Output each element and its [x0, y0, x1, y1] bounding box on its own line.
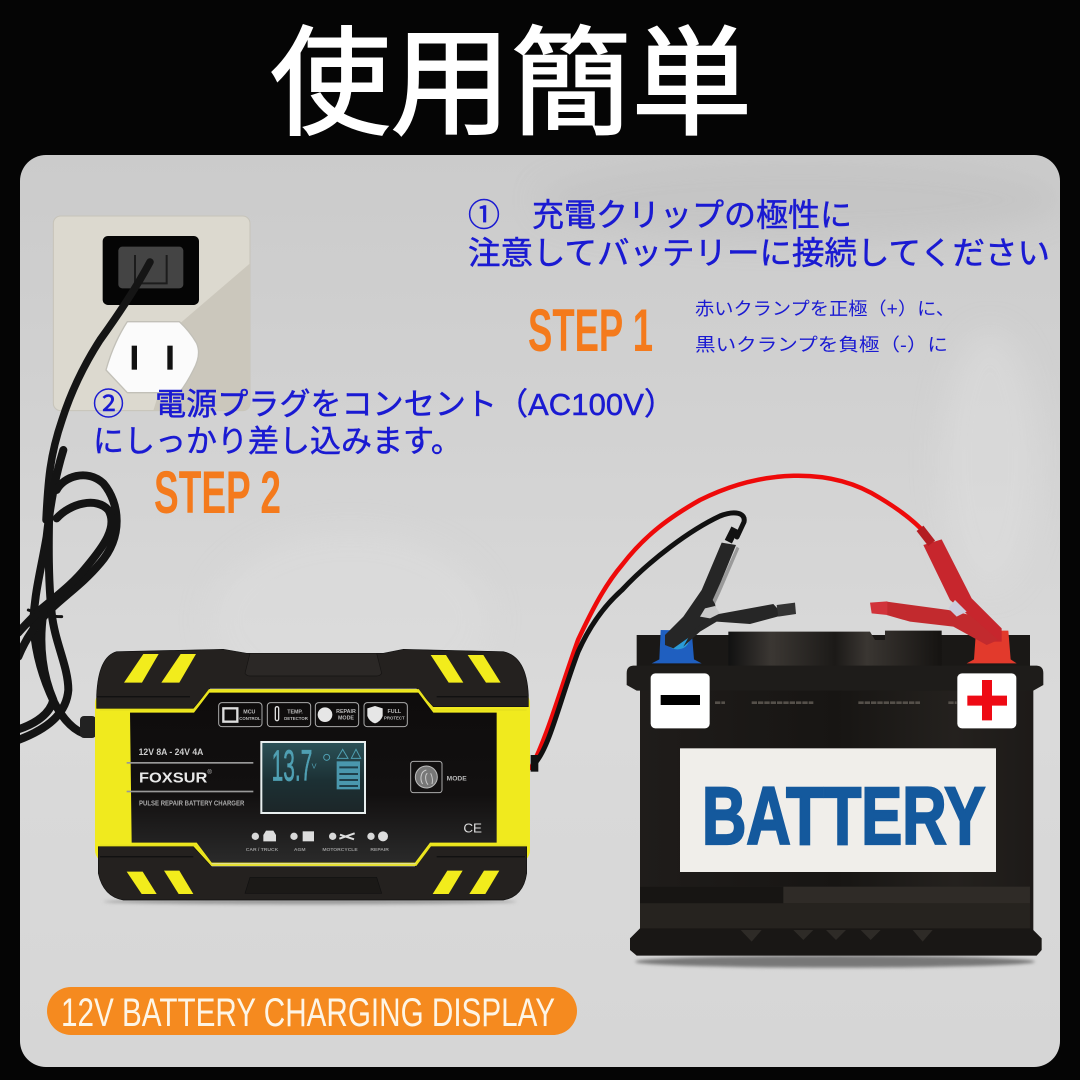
step 2 instruction — [93, 387, 675, 459]
charger: badge labels: FULL — [388, 709, 402, 715]
charger: mode button — [411, 761, 467, 793]
battery: label: BATTERY — [702, 771, 985, 862]
step 2 instruction: にしっかり差し込みます。 — [93, 424, 462, 459]
charger: rating and brand: ® — [207, 769, 212, 776]
charger: LCD display — [261, 742, 365, 813]
title: 使用簡単 — [270, 19, 752, 151]
step 2 instruction: ② 電源プラグをコンセント（AC100V） — [93, 387, 675, 422]
charger: trim lines — [97, 653, 527, 893]
step 1 clamp note: 黒いクランプを負極（-）に — [695, 335, 948, 355]
battery: body — [640, 687, 1033, 933]
charger: LCD display: 13.7 — [272, 742, 312, 791]
battery: shadow — [635, 956, 1035, 968]
battery: label — [680, 748, 996, 872]
charger: yellow vents — [124, 654, 501, 894]
charger: rating and brand — [127, 747, 253, 807]
battery — [627, 528, 1043, 968]
charger: mode indicators: AGM — [294, 847, 305, 853]
battery: positive terminal — [967, 631, 1017, 663]
step 1 instruction — [468, 197, 1050, 271]
step 1 instruction: ① 充電クリップの極性に — [468, 197, 852, 233]
step 1 label: STEP 1 — [528, 297, 653, 364]
charger: cable strain relief — [531, 755, 538, 772]
charger: rating and brand: PULSE REPAIR BATTERY CHARGER — [139, 798, 245, 807]
clamp: red — [870, 528, 1002, 645]
battery: bottom flange — [630, 928, 1042, 956]
charger: front panel — [130, 693, 497, 863]
charger — [95, 649, 538, 904]
charger: badge labels: TEMP. — [287, 709, 303, 715]
charger: mode button: MODE — [447, 776, 467, 782]
charger: badge labels: MCU — [243, 709, 256, 715]
icon: power cord — [18, 262, 150, 740]
charger: LCD display: V — [312, 761, 317, 770]
charger: top black housing — [97, 649, 528, 708]
icon: wall outlet with plug — [53, 216, 250, 411]
charger: rating and brand: 12V 8A - 24V 4A — [139, 747, 204, 757]
charger: feature badges — [219, 703, 407, 727]
charger: mode indicators: MOTORCYCLE — [322, 847, 358, 853]
charger: rating and brand: FOXSUR — [139, 771, 208, 787]
battery: plus sign — [957, 673, 1016, 728]
step 1 instruction: 注意してバッテリーに接続してください — [468, 235, 1050, 271]
charger: mode indicators: REPAIR — [370, 847, 389, 853]
battery: minus sign — [651, 673, 710, 728]
step 2 label: STEP 2 — [154, 459, 281, 526]
charger: mode indicators: CAR / TRUCK — [246, 847, 279, 853]
wire: black negative lead — [536, 513, 744, 762]
charger: badge labels: MODE — [338, 716, 354, 722]
wire: red positive lead — [531, 476, 925, 768]
callout: display caption: 12V BATTERY CHARGING DISPLAY — [61, 991, 555, 1035]
charger: badge labels — [239, 709, 405, 722]
step 1 clamp note: 赤いクランプを正極（+）に、 — [695, 299, 955, 319]
battery: negative terminal — [652, 630, 702, 663]
clamp: black — [665, 528, 796, 648]
charger: bottom black housing — [98, 847, 527, 900]
step 1 clamp note — [695, 299, 955, 355]
battery: lid — [627, 666, 1043, 691]
charger: badge labels: DETECTOR — [284, 716, 309, 721]
charger: mode indicators — [246, 831, 389, 853]
charger: yellow body — [95, 690, 530, 863]
charger: badge labels: PROTECT — [384, 716, 405, 721]
charger: shadow — [103, 899, 517, 904]
charger: badge labels: CONTROL — [239, 716, 261, 721]
charger: badge labels: REPAIR — [336, 709, 356, 715]
battery: top caps — [637, 631, 1030, 667]
charger: CE mark: CE — [463, 820, 482, 835]
